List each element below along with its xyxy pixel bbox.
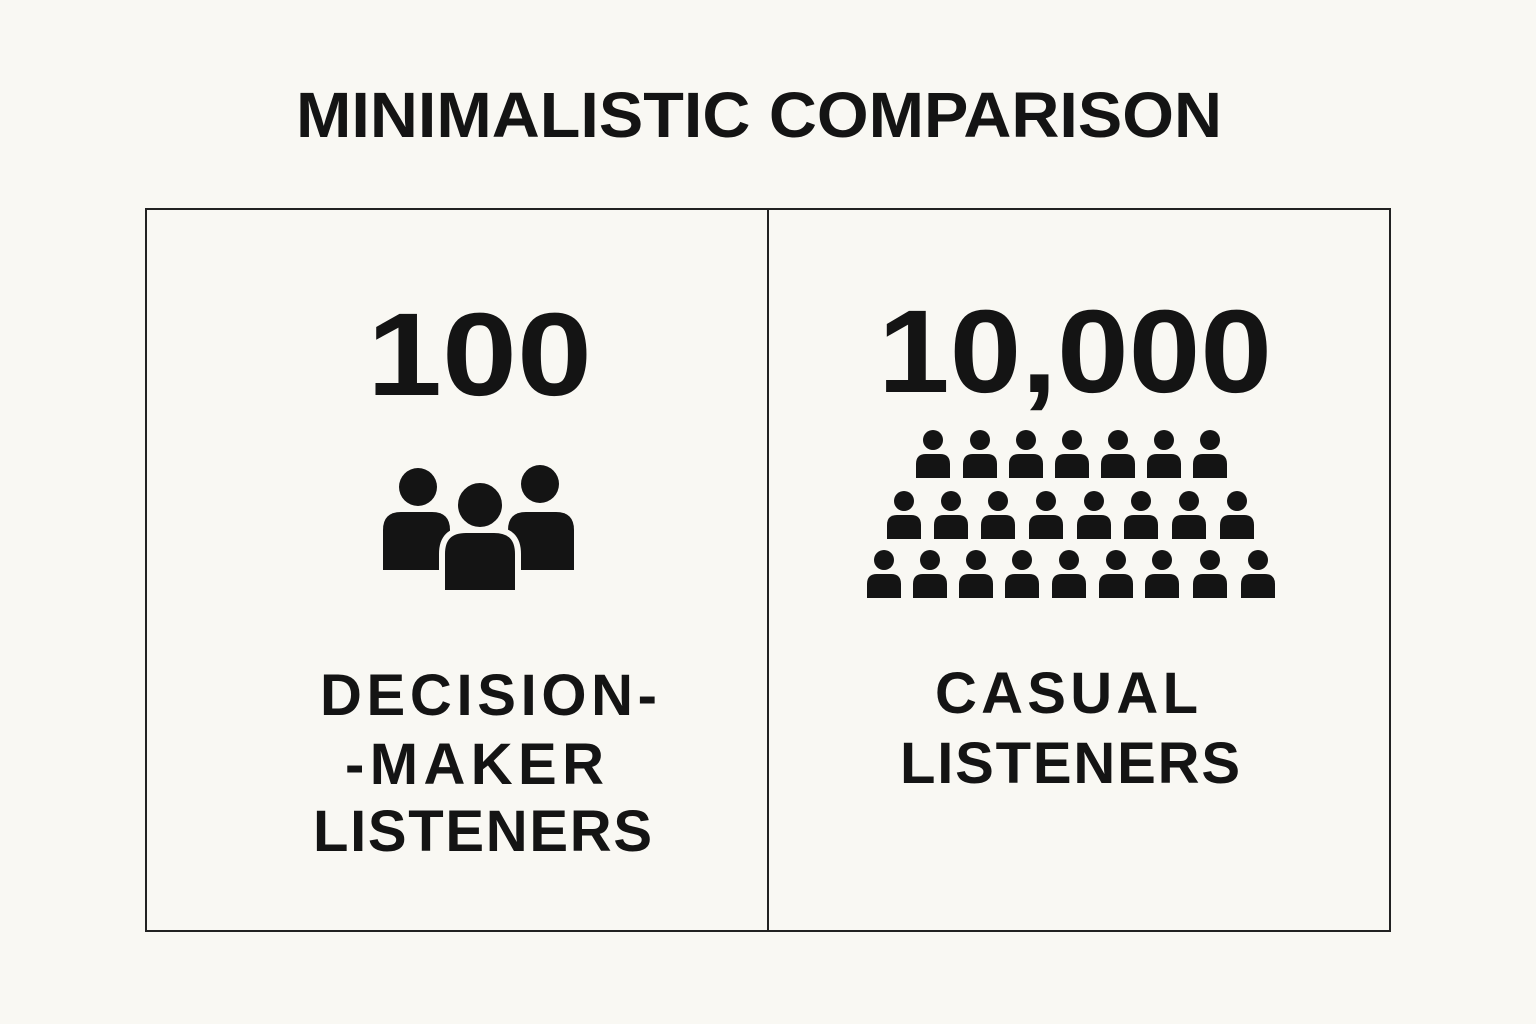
panel: decision-makers xyxy=(313,289,657,864)
icon: group of three people xyxy=(383,465,574,593)
label: casual listeners: CASUAL xyxy=(935,661,1198,726)
number: 100: 100 xyxy=(367,289,592,421)
label: casual listeners: LISTENERS xyxy=(900,731,1240,796)
label: decision-maker listeners: DECISION- xyxy=(320,663,657,728)
label: decision-maker listeners: LISTENERS xyxy=(313,799,652,864)
number: 10,000: 10,000 xyxy=(878,286,1272,418)
icon: crowd of people xyxy=(867,430,1275,598)
comparison frame xyxy=(146,209,1390,931)
label: decision-maker listeners: -MAKER xyxy=(345,732,604,797)
panel: casual listeners xyxy=(867,286,1275,796)
title: MINIMALISTIC COMPARISON xyxy=(296,79,1222,151)
